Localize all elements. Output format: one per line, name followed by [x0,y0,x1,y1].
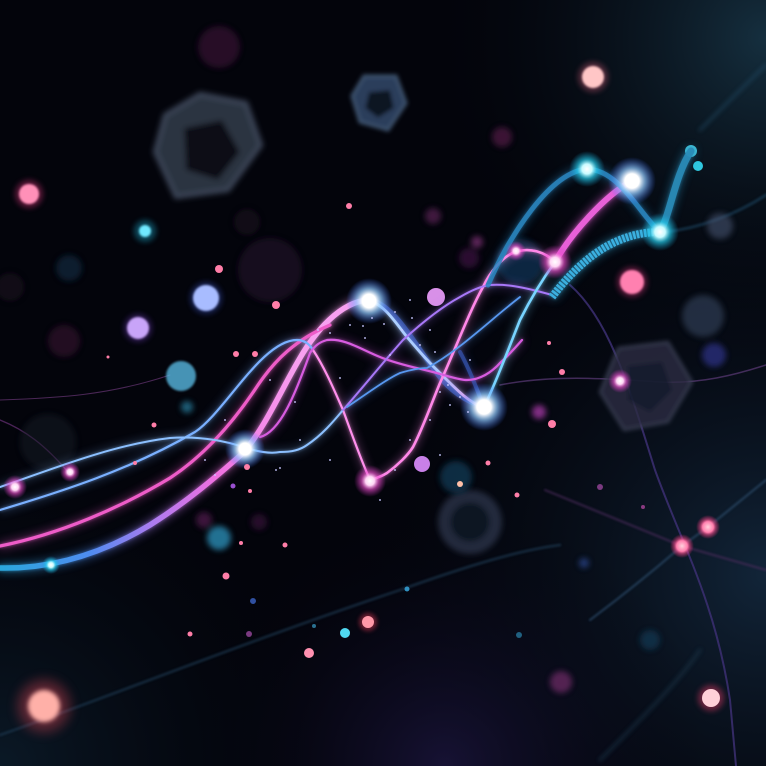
curve soft halo [0,151,691,568]
curve: upper pink ribbon [0,325,330,546]
polyhedron small top [352,76,406,130]
curve: light blue rise [347,297,520,407]
polyhedron right [600,342,692,430]
curve: crest descending [368,300,484,408]
blurred polyhedra [20,76,692,554]
polyhedron large top left [155,94,261,197]
curve: rise to top right dot [660,151,691,232]
glowing curves [0,151,691,568]
curve: blue-white low wave [0,410,343,487]
curve glow halo [0,151,691,568]
curve: dim blue behind crest [370,300,484,407]
curve: pink climb to top right [370,250,555,480]
polyhedron bottom [438,490,502,554]
curve: blue right to pink node [484,262,555,407]
polyhedron faint left [20,414,76,470]
curve: pink ribbon to top right node [555,181,632,262]
curve: blue thin left wave [0,340,313,510]
curve: pink descent to bottom node [313,350,370,480]
curve: lilac wave [260,340,522,437]
small particles [106,203,645,638]
sparkle dust [204,299,471,501]
curve: purple-blue rise [343,285,552,410]
curve: blue striped ribbon [552,232,660,297]
glowing nodes [3,151,720,574]
curve: top blue arc [488,169,660,285]
curve: lower thick ribbon [0,300,368,568]
